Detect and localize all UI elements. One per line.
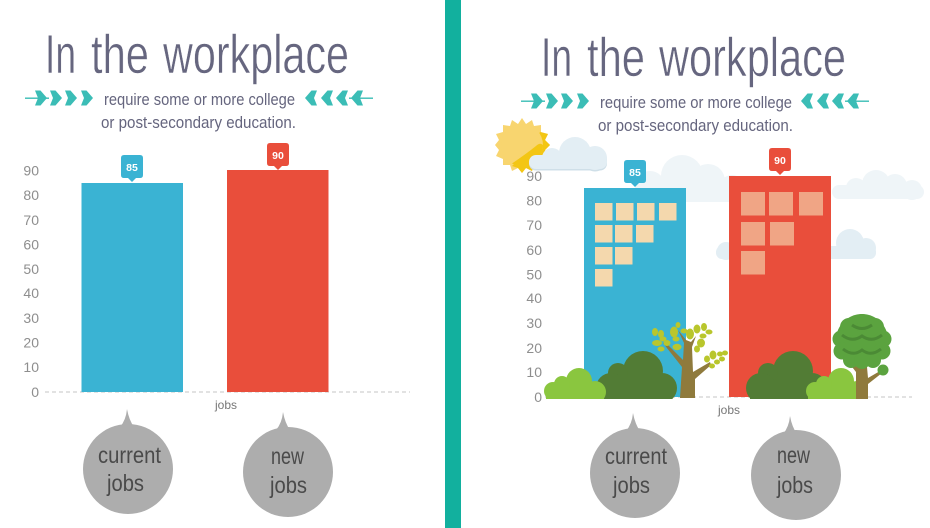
title: In xyxy=(45,23,76,85)
cloud: behind bars xyxy=(635,155,745,202)
title: the xyxy=(91,23,149,85)
value tag 85: 85 xyxy=(126,162,138,174)
title xyxy=(45,23,349,85)
y axis labels: 90 xyxy=(526,168,542,184)
title: workplace xyxy=(658,26,846,88)
y axis labels: 50 xyxy=(23,261,39,277)
left arrow ornament xyxy=(521,94,589,108)
title: In xyxy=(541,26,572,88)
value tag 85 xyxy=(624,160,646,187)
leaves xyxy=(652,322,728,368)
bar: current jobs building xyxy=(584,188,686,397)
axis label: jobs xyxy=(717,403,740,417)
panel: plain chart xyxy=(23,23,410,517)
panel divider xyxy=(445,0,461,528)
y axis labels: 50 xyxy=(526,266,542,282)
value tag 90: 90 xyxy=(774,155,786,167)
value tag 90 xyxy=(267,143,289,170)
value tag 90: 90 xyxy=(272,150,284,162)
bubble: current jobs xyxy=(83,409,173,514)
y axis labels: 70 xyxy=(23,212,39,228)
icon: dark bush right xyxy=(746,351,822,399)
y axis labels: 60 xyxy=(526,242,542,258)
bubble: current jobs: current xyxy=(605,443,668,469)
windows: blue building xyxy=(595,203,676,286)
tree crown xyxy=(832,314,892,369)
bubble: current jobs xyxy=(590,413,680,518)
y axis labels: 80 xyxy=(23,187,39,203)
value tag 90 xyxy=(769,148,791,175)
title: the xyxy=(587,26,645,88)
title xyxy=(541,26,846,88)
y axis labels: 80 xyxy=(526,192,542,208)
cloud: middle right xyxy=(716,229,876,260)
bubble: new jobs: new xyxy=(777,442,810,468)
subtitle: require some or more college xyxy=(600,94,792,112)
cloud: top right xyxy=(832,170,924,200)
bubble: new jobs xyxy=(751,416,841,520)
y axis labels: 40 xyxy=(526,290,542,306)
bubble: new jobs: jobs xyxy=(269,472,307,498)
y axis labels: 30 xyxy=(23,310,39,326)
y axis labels xyxy=(23,162,39,400)
cloud: by the sun xyxy=(529,137,607,172)
bubble: new jobs: new xyxy=(271,443,304,469)
icon: round tree xyxy=(832,314,892,399)
subtitle: require some or more college xyxy=(104,91,295,109)
bubble: current jobs: current xyxy=(98,442,162,468)
y axis labels: 60 xyxy=(23,236,39,252)
bubble: current jobs: jobs xyxy=(106,470,144,496)
right arrow ornament xyxy=(801,94,869,108)
subtitle xyxy=(101,91,296,132)
value tag 85: 85 xyxy=(629,167,641,179)
title: workplace xyxy=(162,23,349,85)
icon: light bush right xyxy=(806,368,856,399)
bar: current jobs xyxy=(82,183,183,392)
bubble: new jobs xyxy=(243,412,333,517)
bar: new jobs building xyxy=(729,176,831,397)
y axis labels: 0 xyxy=(31,384,39,400)
icon: light bush left xyxy=(544,368,606,399)
right arrow ornament xyxy=(305,90,373,106)
y axis labels: 20 xyxy=(23,334,39,350)
value tag 85 xyxy=(121,155,143,182)
baseline xyxy=(45,391,410,393)
bar: new jobs xyxy=(227,170,328,392)
icon: young tree xyxy=(652,322,728,398)
y axis labels: 40 xyxy=(23,285,39,301)
bubble: current jobs: jobs xyxy=(612,472,650,498)
windows: red building xyxy=(741,192,823,274)
y axis labels: 10 xyxy=(23,359,39,375)
subtitle: or post-secondary education. xyxy=(101,114,296,132)
baseline xyxy=(545,396,912,398)
axis label: jobs xyxy=(214,398,237,412)
y axis labels: 90 xyxy=(23,162,39,178)
y axis labels: 20 xyxy=(526,340,542,356)
y axis labels: 30 xyxy=(526,315,542,331)
icon: sun xyxy=(495,118,550,173)
panel: illustrated chart xyxy=(495,26,924,520)
y axis labels: 0 xyxy=(534,389,542,405)
y axis labels: 70 xyxy=(526,217,542,233)
bubble: new jobs: jobs xyxy=(776,472,813,498)
subtitle xyxy=(598,94,793,135)
icon: dark bush left xyxy=(596,351,677,403)
y axis labels xyxy=(526,168,542,405)
y axis labels: 10 xyxy=(526,364,542,380)
subtitle: or post-secondary education. xyxy=(598,117,793,135)
left arrow ornament xyxy=(25,90,93,106)
